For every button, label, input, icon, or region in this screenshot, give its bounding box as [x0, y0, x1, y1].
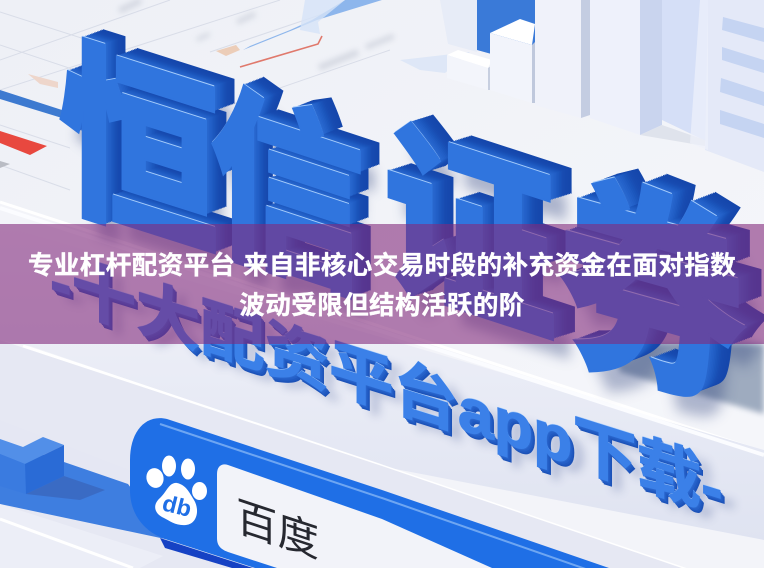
icon: small blue block: [0, 437, 64, 494]
background 3D bar chart: [400, 0, 764, 172]
block shadow: [26, 476, 105, 500]
chart: blue area line: [243, 0, 382, 50]
left wall: [0, 420, 130, 484]
ground shadow of 券: [610, 344, 764, 414]
lower slab: [0, 340, 764, 568]
3D letter 信: 信: [209, 15, 365, 342]
input field: [217, 464, 492, 568]
3D letter 证: 证: [383, 53, 557, 386]
search box label: 百度: [236, 493, 319, 567]
3D letter 券: 券: [557, 97, 747, 458]
headline banner: 专业杠杆配资平台 来自非核心交易时段的补充资金在面对指数: [28, 252, 736, 280]
chart: red bar: [0, 131, 47, 155]
floor slab with sub heading: [0, 225, 764, 540]
chart: blurred labels: [118, 0, 395, 71]
floor slab upper: [0, 202, 764, 568]
chart: blue stripe: [0, 90, 62, 118]
chart: red line: [240, 36, 322, 67]
chart: pale orange bar: [216, 45, 240, 56]
logo letters: db: [160, 490, 194, 522]
sub heading 3D lettering: -十大配资平台app下载-: [50, 244, 723, 525]
blue rail left: [0, 440, 170, 540]
headline banner: 波动受限但结构活跃的阶: [239, 292, 525, 320]
icon: baidu paw: [144, 456, 207, 525]
search box: [130, 418, 609, 568]
headline banner: [0, 224, 764, 344]
